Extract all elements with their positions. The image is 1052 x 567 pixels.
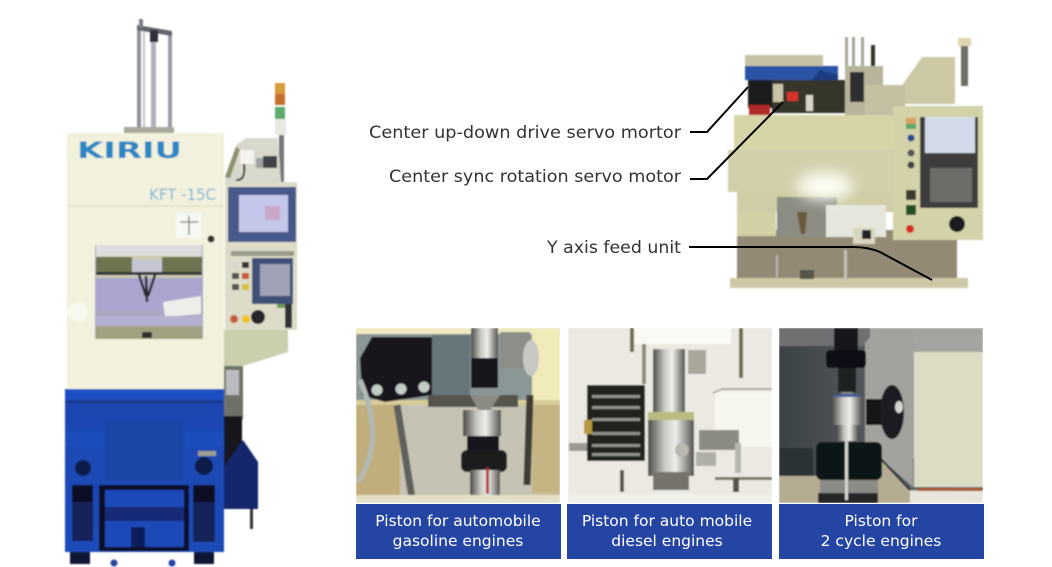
caption text: Piston for automobile [375,512,541,530]
photo: gasoline piston [356,328,566,503]
model name KFT-15C: KFT -15C [149,185,216,204]
caption bar [567,504,772,559]
upper mechanism [745,55,955,116]
lower side housing [222,330,288,529]
control panel [225,182,297,330]
machine cream body [67,133,224,389]
caption text: gasoline engines [393,532,523,550]
label: center up-down drive servo motor: Center up-down drive servo mortor [369,123,681,143]
caption text: Piston for auto mobile [582,512,752,530]
leader line: center up-down servo [690,87,748,132]
photo: rear machine view with servo motors [689,37,983,288]
caption text: diesel engines [611,532,723,550]
operation panel [893,106,983,240]
KIRIU logo: KIRIU [77,139,182,164]
panel: diesel engine piston [567,328,772,559]
machine window [95,245,203,339]
label: Y axis feed unit: Y axis feed unit [546,238,681,258]
caption text: Piston for [844,512,918,530]
top mechanism beside body [225,138,281,183]
caption bar [356,504,561,559]
label: center sync rotation servo motor: Center sync rotation servo motor [389,167,681,187]
top feed rods [845,37,971,86]
caption text: 2 cycle engines [821,532,941,550]
blue machine base [65,389,224,566]
leader line: center sync servo [690,102,783,179]
caption bar [779,504,984,559]
column rods on top of machine [124,19,174,133]
photo: 2 cycle piston [779,328,983,503]
panel: 2 cycle engine piston [779,328,984,559]
photo: KFT-15C machine front view [65,19,297,566]
lower base [730,230,968,288]
machine body [728,115,897,244]
photo: diesel piston [568,328,772,503]
panel: gasoline engine piston [356,328,566,559]
signal tower [275,83,286,183]
leader line: Y axis feed unit [689,247,932,280]
